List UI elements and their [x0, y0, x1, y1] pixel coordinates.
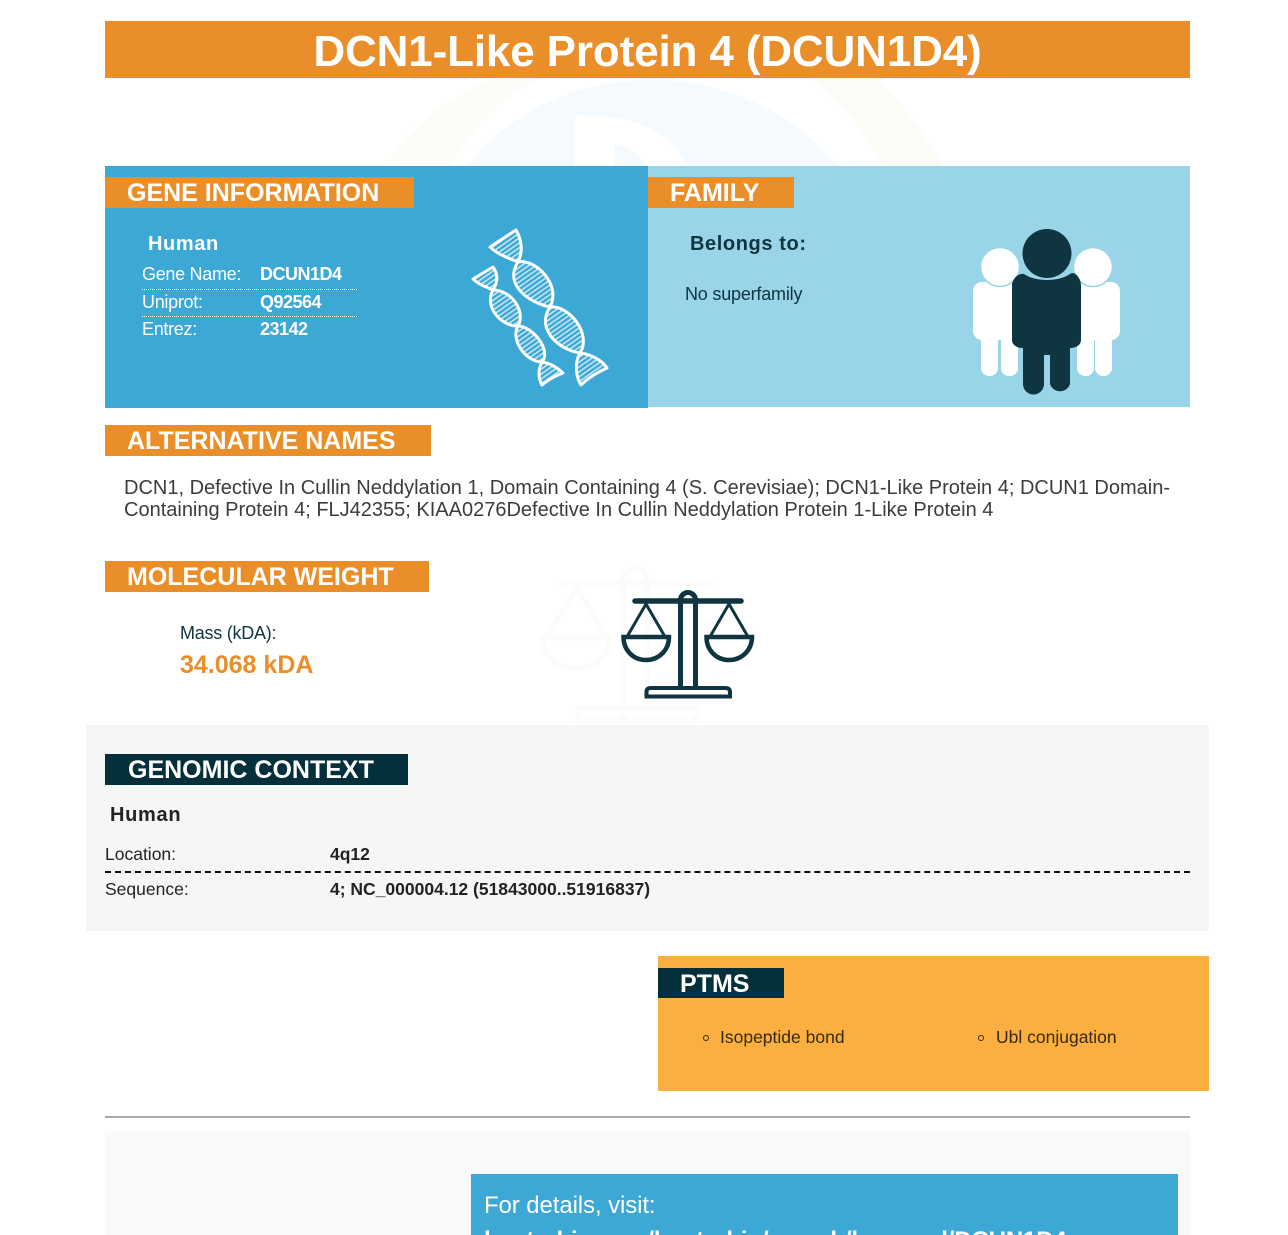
heading: family: FAMILY [670, 179, 759, 207]
family value: No superfamily [685, 284, 802, 304]
sequence row: 4; NC_000004.12 (51843000..51916837) [330, 879, 650, 899]
panel: family [648, 166, 1190, 407]
species label: Human [148, 233, 219, 255]
gene details table [142, 264, 357, 339]
gene details table: 23142 [260, 319, 308, 339]
panel: PTMs [658, 956, 1209, 1091]
callout: details link [471, 1174, 1178, 1235]
panel: genomic context [86, 725, 1209, 931]
PTM item: Ubl conjugation: Ubl conjugation [996, 1027, 1117, 1047]
heading: PTMs: PTMS [680, 970, 749, 998]
PTM item: isopeptide bond: Isopeptide bond [720, 1027, 845, 1047]
gene details table: Q92564 [260, 292, 321, 312]
species label: Human [110, 804, 181, 826]
sequence row: Sequence: [105, 879, 189, 899]
gene details table: Gene Name: [142, 264, 241, 284]
heading: molecular weight: MOLECULAR WEIGHT [127, 563, 394, 591]
title banner: DCN1-Like Protein 4 (DCUN1D4) [313, 27, 982, 76]
panel: footer [105, 1131, 1190, 1235]
location row [105, 843, 1190, 873]
heading: family [648, 177, 794, 208]
location row: Location: [105, 844, 176, 864]
location row: 4q12 [330, 844, 370, 864]
heading: gene information: GENE INFORMATION [127, 179, 379, 207]
alternative names text [124, 477, 1170, 521]
title banner [105, 21, 1190, 78]
mass label: Mass (kDA): [180, 623, 276, 643]
panel: gene information [105, 166, 648, 408]
alternative names text: Containing Protein 4; FLJ42355; KIAA0276Defective In Cullin Neddylation Protein 1-Like Protein 4 [124, 499, 993, 521]
alternative names text: DCN1, Defective In Cullin Neddylation 1, Domain Containing 4 (S. Cerevisiae); DCN1-Like Protein 4; DCUN1 Domain- [124, 477, 1170, 499]
gene details table: Uniprot: [142, 292, 203, 312]
mass value: 34.068 kDA [180, 651, 313, 679]
belongs to label: Belongs to: [690, 233, 807, 255]
gene details table: DCUN1D4 [260, 264, 342, 284]
heading: genomic context: GENOMIC CONTEXT [128, 756, 374, 784]
callout: details link: For details, visit: [484, 1192, 655, 1219]
heading: alternative names: ALTERNATIVE NAMES [127, 427, 396, 455]
sequence row [105, 879, 650, 899]
gene details table: Entrez: [142, 319, 197, 339]
heading: PTMs [658, 968, 784, 998]
